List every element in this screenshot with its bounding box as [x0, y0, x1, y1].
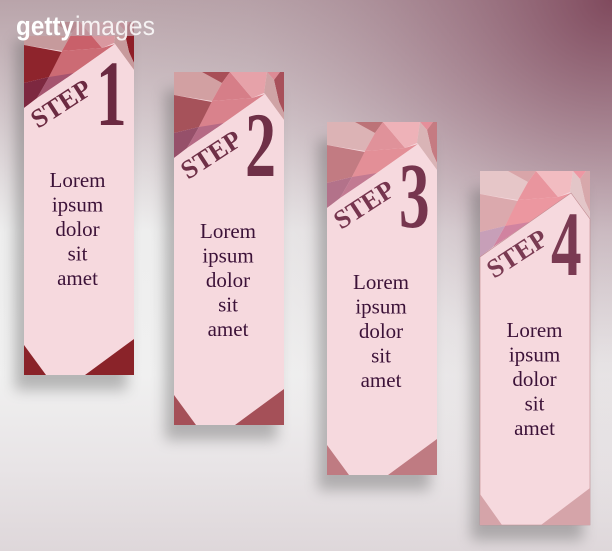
step 3 body text: sit [371, 344, 391, 368]
step 2 body text [200, 219, 256, 341]
panel: step 1 card [15, 22, 134, 390]
step 3 label: STEP [328, 174, 400, 235]
step 4 body text: sit [525, 392, 545, 416]
watermark: gettyimages: getty [16, 11, 74, 41]
card 4 shadow [471, 189, 583, 540]
step 3 body text [353, 270, 409, 392]
step 2 body text: dolor [206, 268, 250, 292]
card 2 shadow [165, 90, 277, 440]
card 1 artwork [24, 22, 134, 375]
step 4 body text: ipsum [509, 342, 560, 366]
step 2 body text: amet [208, 317, 249, 341]
card 3 shadow [318, 140, 430, 490]
card 1 shadow [15, 40, 127, 390]
step 2 label: STEP [175, 124, 247, 185]
step 2 body text: Lorem [200, 219, 256, 243]
panel: step 2 card [165, 72, 284, 440]
step 3 body text: Lorem [353, 270, 409, 294]
step 1 body text: amet [57, 266, 98, 290]
step 1 body text: ipsum [52, 192, 103, 216]
step 1 body text: dolor [55, 217, 100, 241]
step 1 label: STEP [25, 73, 97, 134]
step 1 body text: sit [68, 242, 88, 266]
step 3 body text: amet [361, 368, 402, 392]
step 3 body text: ipsum [355, 294, 407, 318]
card 4 artwork [480, 171, 590, 525]
step 3 body text: dolor [359, 319, 403, 343]
step 2 number: 2 [245, 94, 276, 196]
card 3 artwork [327, 122, 437, 475]
step 2 body text: sit [218, 292, 238, 316]
step 4 body text: amet [514, 416, 555, 440]
watermark: gettyimages: images [75, 11, 155, 41]
card 2 artwork [174, 72, 284, 425]
step 4 body text: dolor [512, 367, 557, 391]
step 1 body text: Lorem [50, 168, 105, 192]
panel: step 4 card [471, 171, 590, 540]
step 3 number: 3 [399, 145, 430, 248]
step 4 body text [507, 318, 562, 440]
step 1 number: 1 [96, 43, 127, 146]
step 4 label: STEP [481, 223, 553, 284]
panel: step 3 card [318, 122, 437, 490]
step 1 body text [50, 168, 105, 290]
step 4 number: 4 [551, 193, 582, 295]
step 2 body text: ipsum [202, 244, 254, 268]
step 4 body text: Lorem [507, 318, 562, 342]
watermark: gettyimages [16, 11, 155, 41]
